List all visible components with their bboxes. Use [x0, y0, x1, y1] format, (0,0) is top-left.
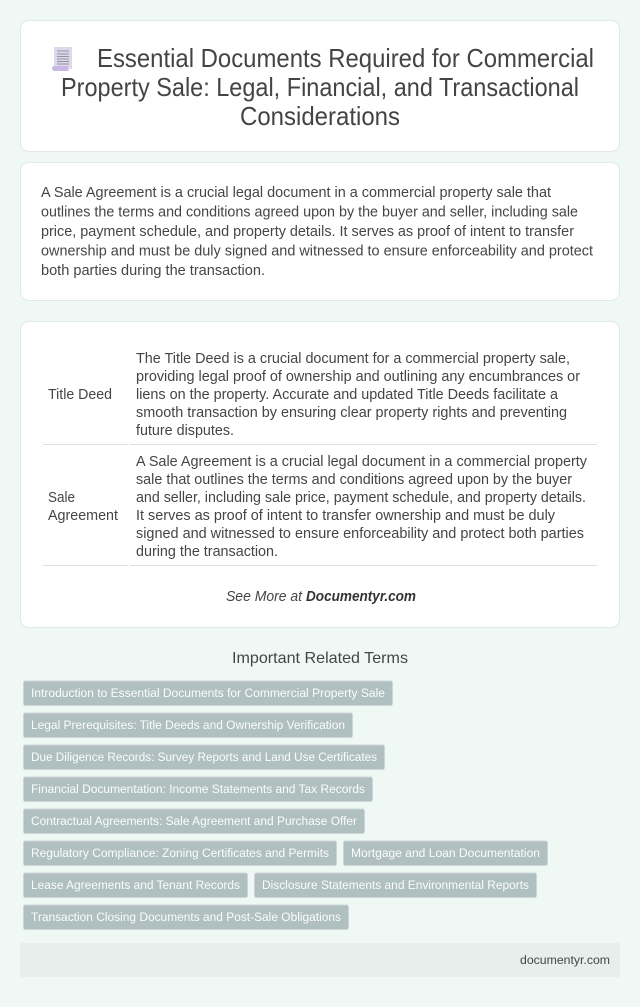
tag: Contractual Agreements: Sale Agreement and Purchase Offer: [31, 814, 357, 828]
tag: Disclosure Statements and Environmental Reports: [262, 878, 529, 892]
title text: Property Sale: Legal, Financial, and Transactional: [61, 74, 579, 102]
table row: Title Deed: Title Deed: [48, 387, 112, 403]
table row: Sale Agreement: Sale: [48, 490, 75, 506]
title text: Essential Documents Required for Commercial: [97, 45, 594, 73]
table row: Title Deed: future disputes.: [136, 423, 234, 439]
tag: [24, 873, 248, 898]
tag: Transaction Closing Documents and Post-Sale Obligations: [31, 910, 341, 924]
tag: [24, 905, 348, 930]
tag: [24, 681, 392, 706]
tag: [24, 841, 336, 866]
panel: title: [20, 20, 620, 152]
table row: Title Deed: providing legal proof of ownership and outlining any encumbrances or: [136, 369, 580, 385]
table row: Sale Agreement: signed and witnessed to ensure enforceability and protect both parties: [136, 526, 584, 542]
tag: Due Diligence Records: Survey Reports and Land Use Certificates: [31, 750, 377, 764]
intro paragraph: outlines the terms and conditions agreed upon by the buyer and seller, including sale: [41, 204, 578, 220]
table row: Sale Agreement: during the transaction.: [136, 544, 278, 560]
table row: Sale Agreement: and seller, including sale price, payment schedule, and property details.: [136, 490, 586, 506]
tag: [24, 777, 372, 802]
icon: receipt document: [52, 47, 72, 71]
tag: Regulatory Compliance: Zoning Certificates and Permits: [31, 846, 329, 860]
tag: [24, 809, 364, 834]
title text: Considerations: [240, 103, 400, 131]
intro paragraph: A Sale Agreement is a crucial legal document in a commercial property sale that: [41, 185, 551, 201]
panel: introduction: [20, 162, 620, 300]
intro paragraph: [41, 185, 593, 279]
footer: [20, 943, 620, 977]
intro paragraph: both parties during the transaction.: [41, 263, 265, 279]
intro paragraph: ownership and must be duly signed and witnessed to ensure enforceability and protect: [41, 244, 593, 260]
table row: Title Deed: liens on the property. Accurate and updated Title Deeds facilitate a: [136, 387, 558, 403]
tag: Mortgage and Loan Documentation: [351, 846, 540, 860]
table row: Sale Agreement: A Sale Agreement is a crucial legal document in a commercial property: [136, 454, 588, 470]
tag: Financial Documentation: Income Statements and Tax Records: [31, 782, 365, 796]
table row: Sale Agreement: It serves as proof of intent to transfer ownership and must be duly: [136, 508, 556, 524]
tag: Introduction to Essential Documents for Commercial Property Sale: [31, 686, 385, 700]
footer: documentyr.com: [520, 953, 610, 967]
panel: document table: [20, 322, 620, 628]
see more link: [226, 589, 416, 605]
intro paragraph: price, payment schedule, and property details. It serves as proof of intent to transfer: [41, 224, 574, 240]
tag: [24, 713, 352, 738]
table row: Sale Agreement: sale that outlines the terms and conditions agreed upon by the buyer: [136, 472, 572, 488]
heading: related terms: Important Related Terms: [232, 650, 408, 667]
tag: Legal Prerequisites: Title Deeds and Ownership Verification: [31, 718, 345, 732]
table row: Title Deed: [43, 351, 597, 445]
see more link: Documentyr.com: [306, 589, 416, 605]
tag: [24, 745, 384, 770]
table row: Sale Agreement: Agreement: [48, 508, 118, 524]
table row: Sale Agreement: [43, 454, 597, 566]
tag: Lease Agreements and Tenant Records: [31, 878, 240, 892]
tag: [254, 873, 536, 898]
table row: Title Deed: The Title Deed is a crucial document for a commercial property sale,: [136, 351, 570, 367]
related term tags: [24, 681, 548, 930]
tag: [344, 841, 548, 866]
table row: Title Deed: smooth transaction by ensuring clear property rights and preventing: [136, 405, 567, 421]
title text: [61, 45, 594, 131]
see more link: See More at: [226, 589, 303, 605]
